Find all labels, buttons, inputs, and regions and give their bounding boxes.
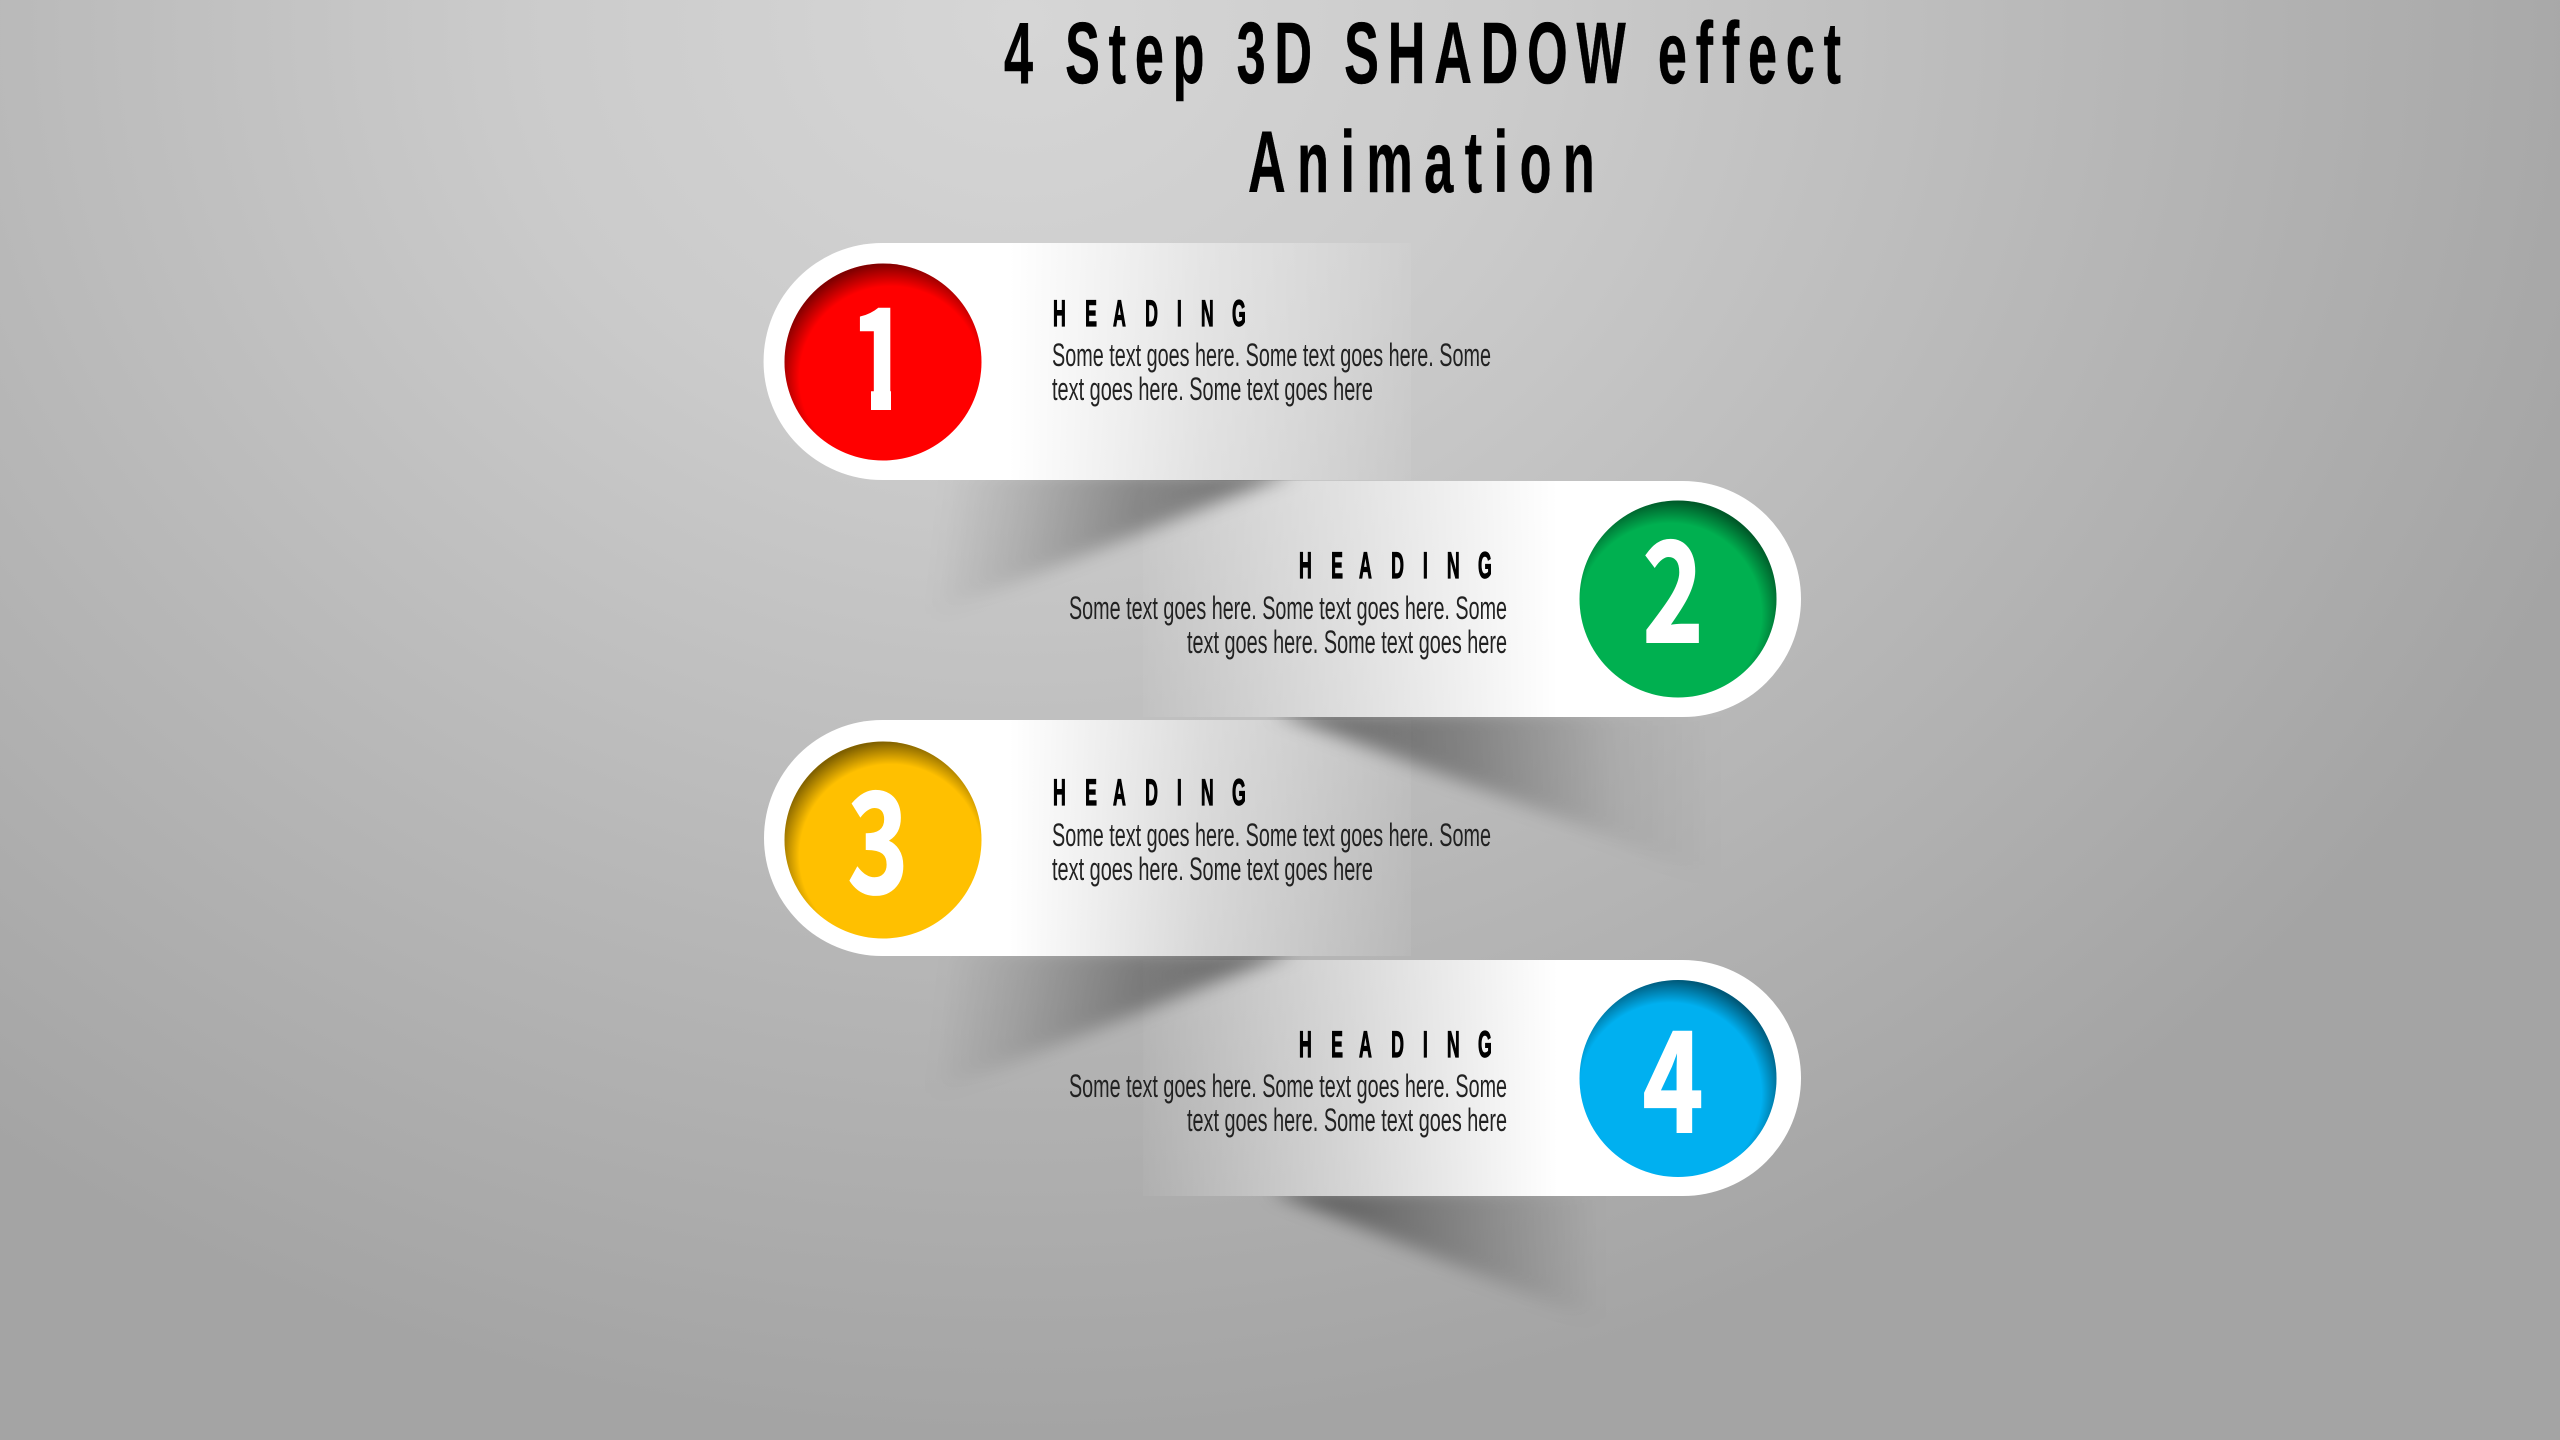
- step 3 body text: Some text goes here. Some text goes here. Some: [1052, 817, 1491, 853]
- panel: step 4: [1069, 960, 1801, 1196]
- step 3 heading: HEADING: [1053, 773, 1246, 814]
- step 2 number badge: [1580, 482, 1776, 698]
- shadow under step 2: [1277, 717, 1652, 840]
- title: 4 Step 3D SHADOW effect: [1004, 5, 1841, 102]
- panel: step 1: [764, 243, 1491, 480]
- step 1 body text: Some text goes here. Some text goes here. Some: [1052, 337, 1491, 373]
- shadow under step 1: [960, 480, 1292, 592]
- step 4 body text: text goes here. Some text goes here: [1187, 1102, 1507, 1138]
- step 4 number badge: 4: [1643, 972, 1703, 1173]
- step 1 body text: [1052, 337, 1491, 407]
- step 4 pill: [1143, 960, 1801, 1196]
- step 3 number badge: [784, 733, 982, 938]
- step 4 number badge: [1580, 972, 1776, 1177]
- step 1 pill: [764, 243, 1411, 480]
- step 1 number badge: [784, 249, 982, 460]
- step 1 body text: text goes here. Some text goes here: [1052, 371, 1373, 407]
- step 2 body text: text goes here. Some text goes here: [1187, 624, 1507, 660]
- step 4 heading: HEADING: [1299, 1025, 1492, 1066]
- title: Animation: [1248, 114, 1595, 211]
- step 2 body text: Some text goes here. Some text goes here. Some: [1069, 590, 1507, 626]
- panel: step 3: [764, 720, 1491, 956]
- title: [1004, 5, 1841, 211]
- step 3 body text: text goes here. Some text goes here: [1052, 851, 1373, 887]
- shadow under step 3: [966, 956, 1292, 1070]
- panel: step 2: [1069, 481, 1801, 717]
- step 4 body text: Some text goes here. Some text goes here. Some: [1069, 1068, 1507, 1104]
- step 3 number badge: 3: [848, 733, 908, 934]
- step 4 body text: [1069, 1068, 1507, 1138]
- step 3 pill: [764, 720, 1411, 956]
- step 1 number badge: 1: [850, 249, 910, 450]
- step 2 body text: [1069, 590, 1507, 660]
- step 2 pill: [1143, 481, 1801, 717]
- step 3 body text: [1052, 817, 1491, 887]
- step 2 number badge: 2: [1643, 482, 1703, 683]
- shadow under step 4: [1273, 1196, 1570, 1300]
- step 1 heading: HEADING: [1053, 294, 1246, 335]
- step 2 heading: HEADING: [1299, 546, 1492, 587]
